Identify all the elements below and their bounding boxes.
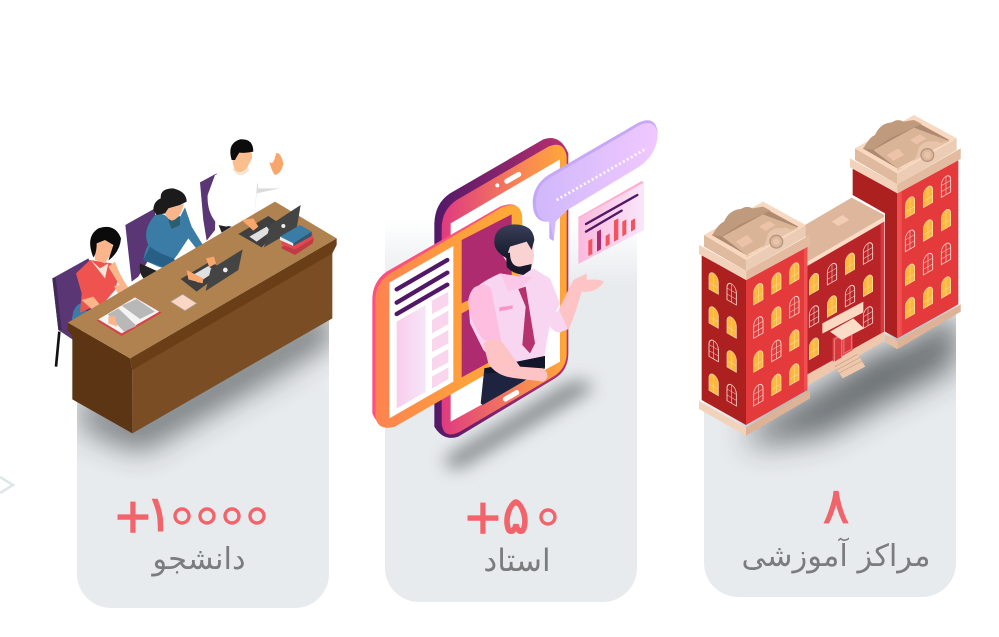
lesson panel <box>372 204 522 428</box>
right tower <box>850 115 961 349</box>
panel: centers card <box>704 290 956 597</box>
open book <box>97 297 162 336</box>
student 3: man in white <box>208 139 283 233</box>
desk shadow <box>83 307 333 450</box>
panel: students card <box>77 300 329 608</box>
stat: 10000+ students: ۰ <box>245 491 269 542</box>
center wing <box>805 198 884 386</box>
desk <box>68 202 337 433</box>
illustration: professor in tablet <box>372 120 658 468</box>
tablet shadow <box>445 381 592 468</box>
label: students: دانشجو <box>150 542 246 577</box>
infographic <box>0 115 961 608</box>
professor figure <box>468 224 604 405</box>
chair 3 <box>200 173 217 241</box>
stat: 10000+ students: ۰ <box>170 491 194 542</box>
stat: 50+ professors: ۵ <box>502 486 530 546</box>
laptop 2 <box>238 205 301 247</box>
building shadow <box>747 308 958 445</box>
tablet body <box>434 138 568 438</box>
stat: 10000+ students: ۰ <box>220 491 244 542</box>
student 2: woman in teal <box>140 188 210 278</box>
stat: 50+ professors <box>463 486 559 546</box>
laptop 1 <box>181 249 243 292</box>
chart card <box>578 181 644 264</box>
stat: 10000+ students: + <box>113 489 153 544</box>
stat: 8 centers: ۸ <box>823 477 849 535</box>
illustration: school building <box>699 115 961 445</box>
stat: 10000+ students: ۱ <box>146 485 172 543</box>
chair 2 <box>125 208 157 282</box>
student 1: woman in red <box>72 227 130 327</box>
speech bubble <box>533 120 658 241</box>
illustration: students at desk <box>52 139 337 450</box>
stat: 50+ professors: ۰ <box>535 493 559 544</box>
note pad <box>171 294 197 311</box>
panel: professors card <box>385 220 637 602</box>
stack of books <box>280 225 314 255</box>
label: professors: استاد <box>483 543 551 579</box>
stat: 10000+ students: ۰ <box>195 491 219 542</box>
label: training centers: مراکز آموزشی <box>742 537 930 574</box>
left tower <box>699 202 810 436</box>
stat: 10000+ students <box>113 485 269 544</box>
stat: 50+ professors: + <box>463 490 503 545</box>
chevron mark at left edge <box>0 477 13 493</box>
entrance <box>822 302 865 378</box>
chair 1 <box>52 258 107 367</box>
